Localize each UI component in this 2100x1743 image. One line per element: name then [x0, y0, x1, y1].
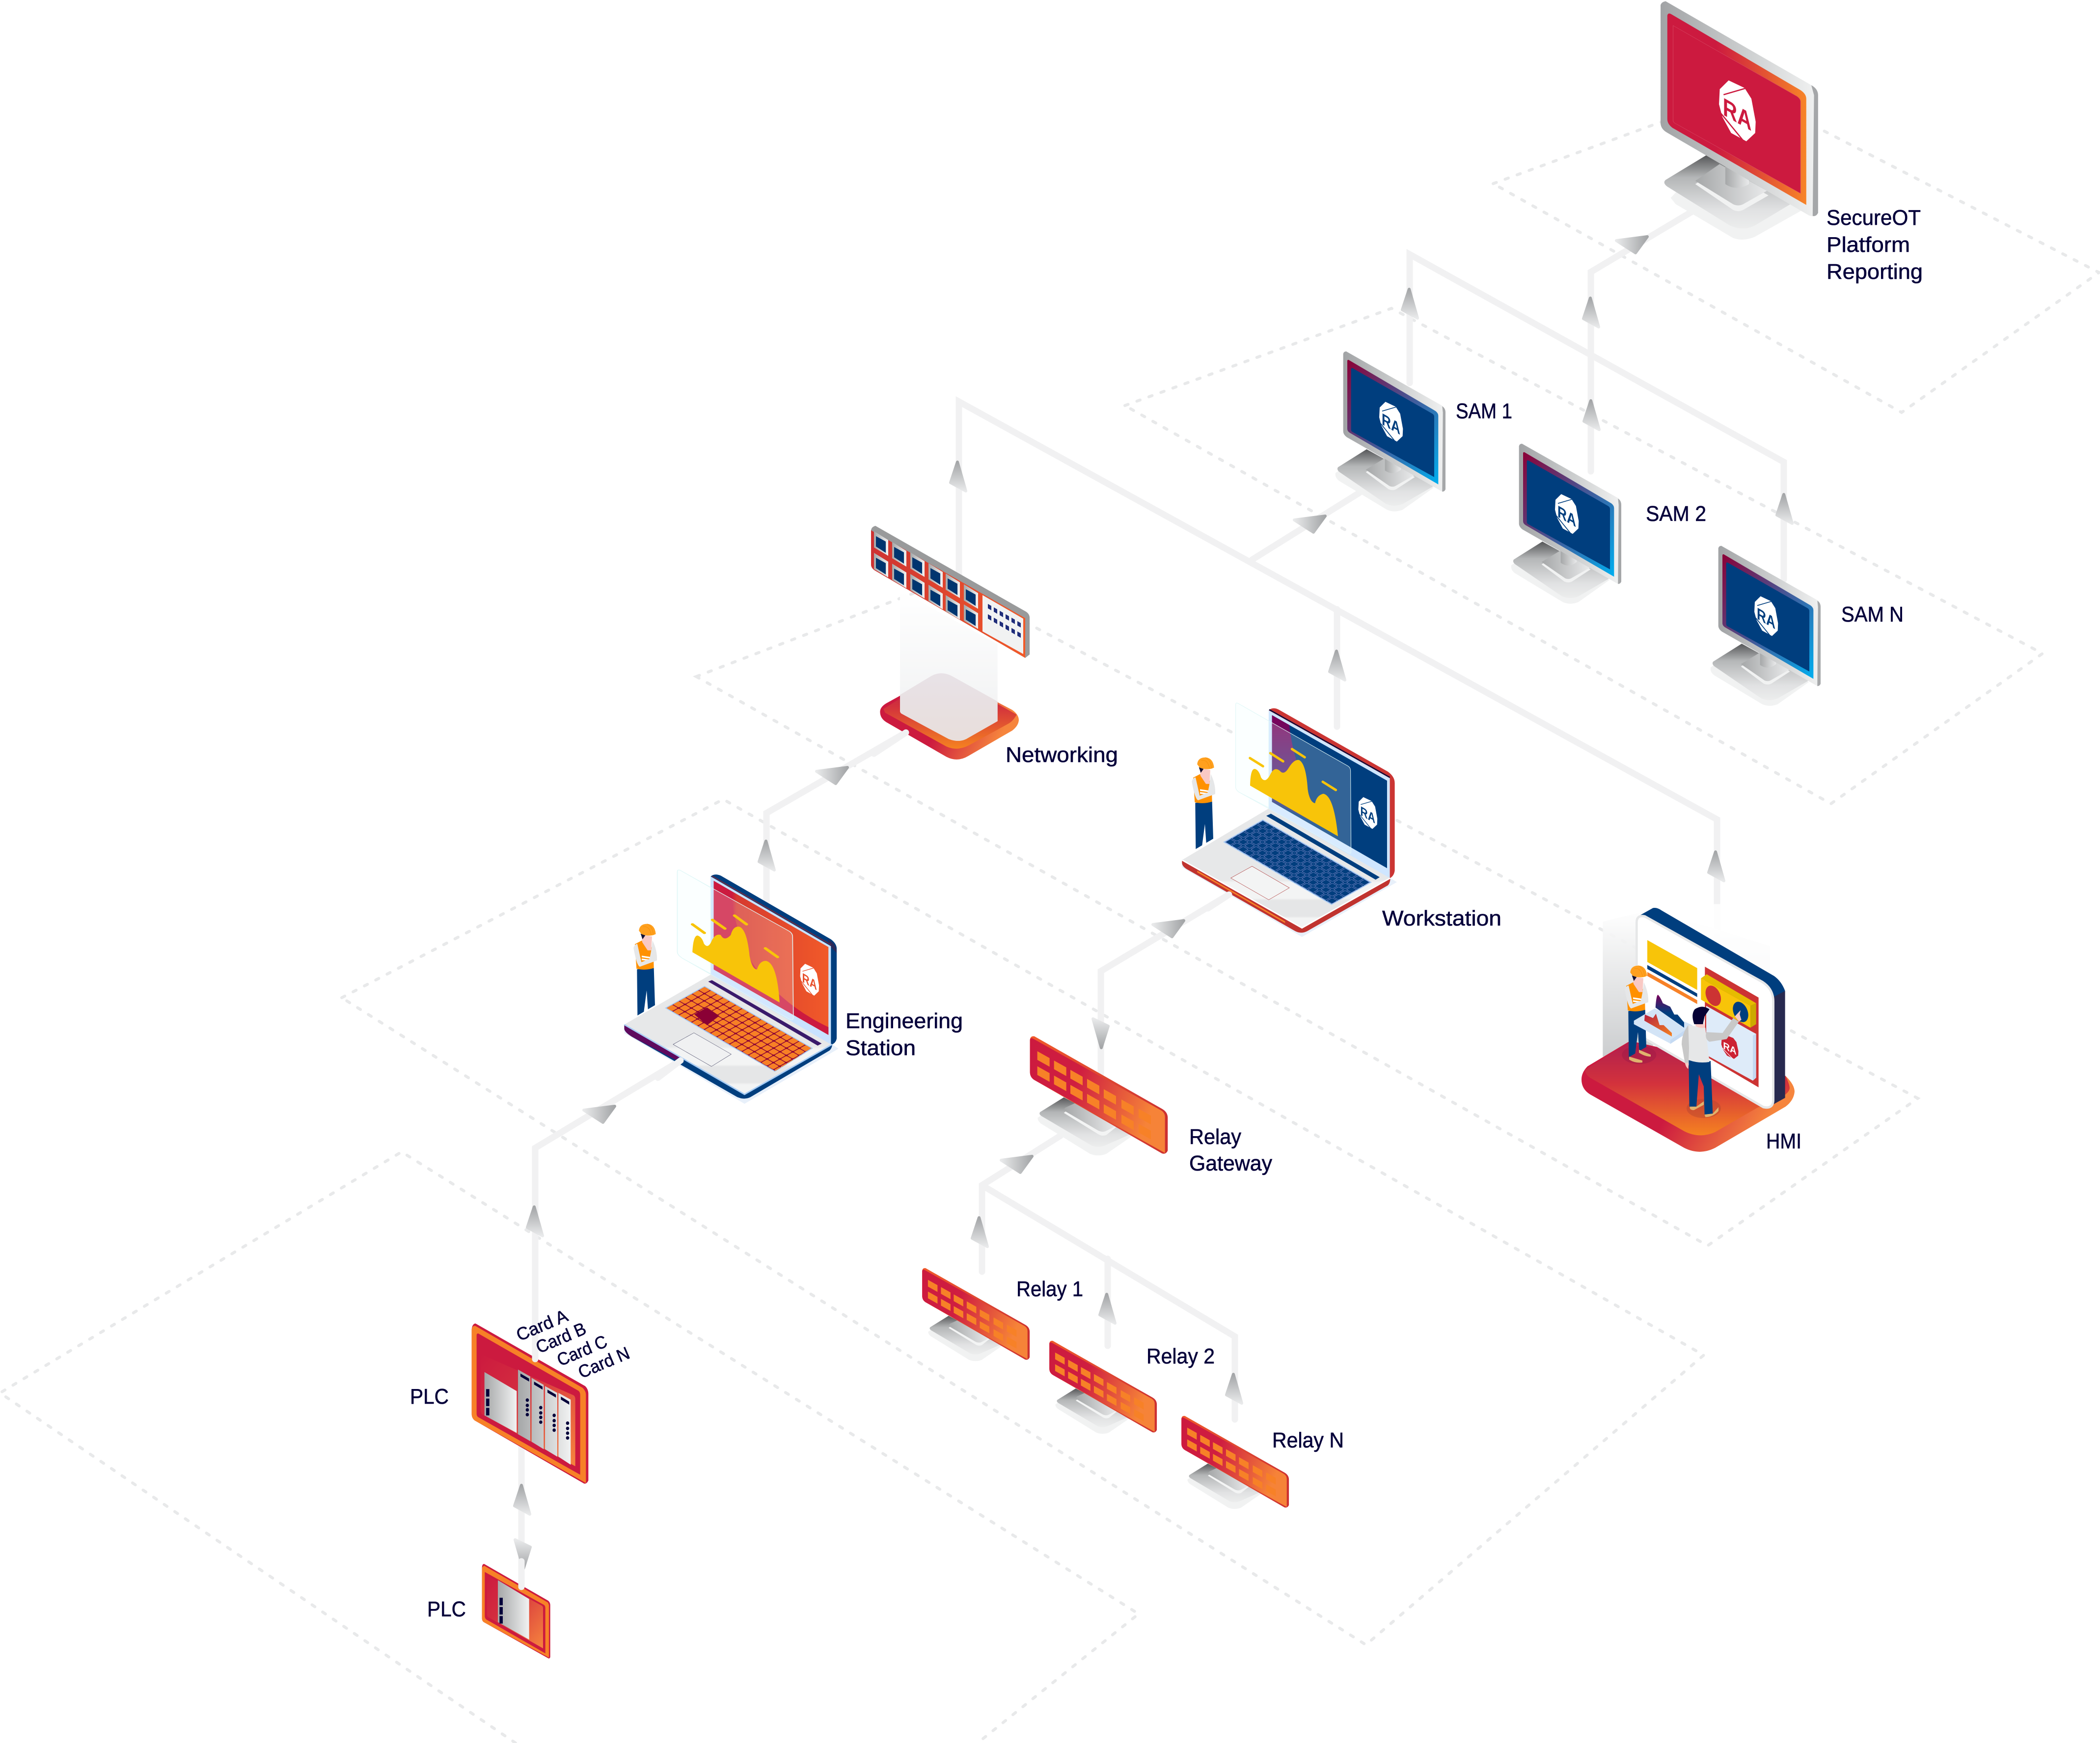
label: Cards: Card N — [575, 1343, 632, 1382]
logo: RA on SAM 2: RA — [1557, 501, 1576, 531]
label: Relay Gateway: Relay — [1189, 1125, 1241, 1149]
label: Engineering Station: Station — [845, 1036, 916, 1060]
logo: RA on SAM 1 — [1379, 402, 1403, 441]
laptop: Workstation — [1182, 703, 1397, 937]
relay 2 — [1049, 1341, 1157, 1434]
arrows — [515, 237, 1792, 1569]
label: Relay Gateway — [1189, 1125, 1272, 1175]
label: Networking: Networking — [1006, 743, 1118, 767]
label: Relay Gateway: Gateway — [1189, 1151, 1272, 1175]
relay gateway — [1030, 1036, 1168, 1155]
logo: RA on SAM 2 — [1555, 494, 1579, 534]
label: Cards: Card C — [554, 1331, 610, 1370]
monitor: SAM 1 — [1336, 352, 1445, 512]
label: Relay N: Relay N — [1272, 1428, 1344, 1452]
label: PLC small: PLC — [427, 1597, 466, 1621]
label: SecureOT Platform Reporting: Reporting — [1827, 260, 1923, 284]
label: Cards — [513, 1306, 632, 1382]
PLC with cards — [472, 1324, 588, 1484]
logo: RA on HMI: RA — [1723, 1040, 1737, 1057]
logo: RA white — [1719, 81, 1756, 141]
label: HMI: HMI — [1766, 1129, 1801, 1153]
label: Relay 1: Relay 1 — [1016, 1277, 1083, 1301]
label: Workstation: Workstation — [1382, 906, 1501, 930]
label: PLC: PLC — [410, 1385, 449, 1409]
label: SecureOT Platform Reporting — [1827, 206, 1923, 284]
HMI station — [1582, 904, 1795, 1152]
logo: RA on engineering station: RA — [802, 970, 817, 993]
label: Cards: Card B — [533, 1318, 589, 1357]
monitor: SAM N — [1711, 546, 1821, 706]
logo: RA white: RA — [1723, 92, 1751, 136]
label: Engineering Station — [845, 1009, 963, 1060]
label: Cards: Card A — [513, 1306, 571, 1345]
person: workstation engineer — [1192, 758, 1215, 849]
monitor: SecureOT Platform Reporting — [1661, 1, 1818, 240]
label: SAM 1: SAM 1 — [1456, 399, 1512, 423]
label: SAM 2: SAM 2 — [1646, 502, 1706, 526]
logo: RA on workstation: RA — [1360, 804, 1375, 827]
monitor: SAM 2 — [1511, 444, 1621, 604]
label: SecureOT Platform Reporting: Platform — [1827, 233, 1910, 257]
laptop: Engineering Station — [624, 870, 839, 1104]
connector stubs over devices — [521, 733, 1229, 1587]
relay 1 — [922, 1268, 1030, 1361]
person: HMI engineer — [1625, 966, 1651, 1062]
HMI chart shelf and operator — [1634, 995, 1742, 1117]
label: Relay 2: Relay 2 — [1146, 1344, 1215, 1368]
logo: RA on SAM N — [1754, 596, 1778, 636]
label: SecureOT Platform Reporting: SecureOT — [1827, 206, 1921, 230]
small PLC — [482, 1564, 550, 1659]
glass backdrop — [1603, 909, 1770, 1057]
logo: RA on SAM N: RA — [1757, 603, 1775, 633]
label: Engineering Station: Engineering — [845, 1009, 963, 1033]
logo: RA on SAM 1: RA — [1382, 409, 1400, 438]
label: SAM N: SAM N — [1841, 602, 1904, 626]
connector lines — [521, 210, 1784, 1587]
platform — [1582, 1041, 1795, 1152]
logo: RA on engineering station — [800, 964, 819, 996]
relay N — [1181, 1416, 1289, 1509]
logo: RA on HMI — [1721, 1035, 1739, 1059]
networking switch on plate — [871, 526, 1030, 760]
person: engineering station engineer — [633, 924, 657, 1015]
logo: RA on workstation — [1358, 797, 1377, 829]
HMI screen — [1640, 908, 1785, 999]
